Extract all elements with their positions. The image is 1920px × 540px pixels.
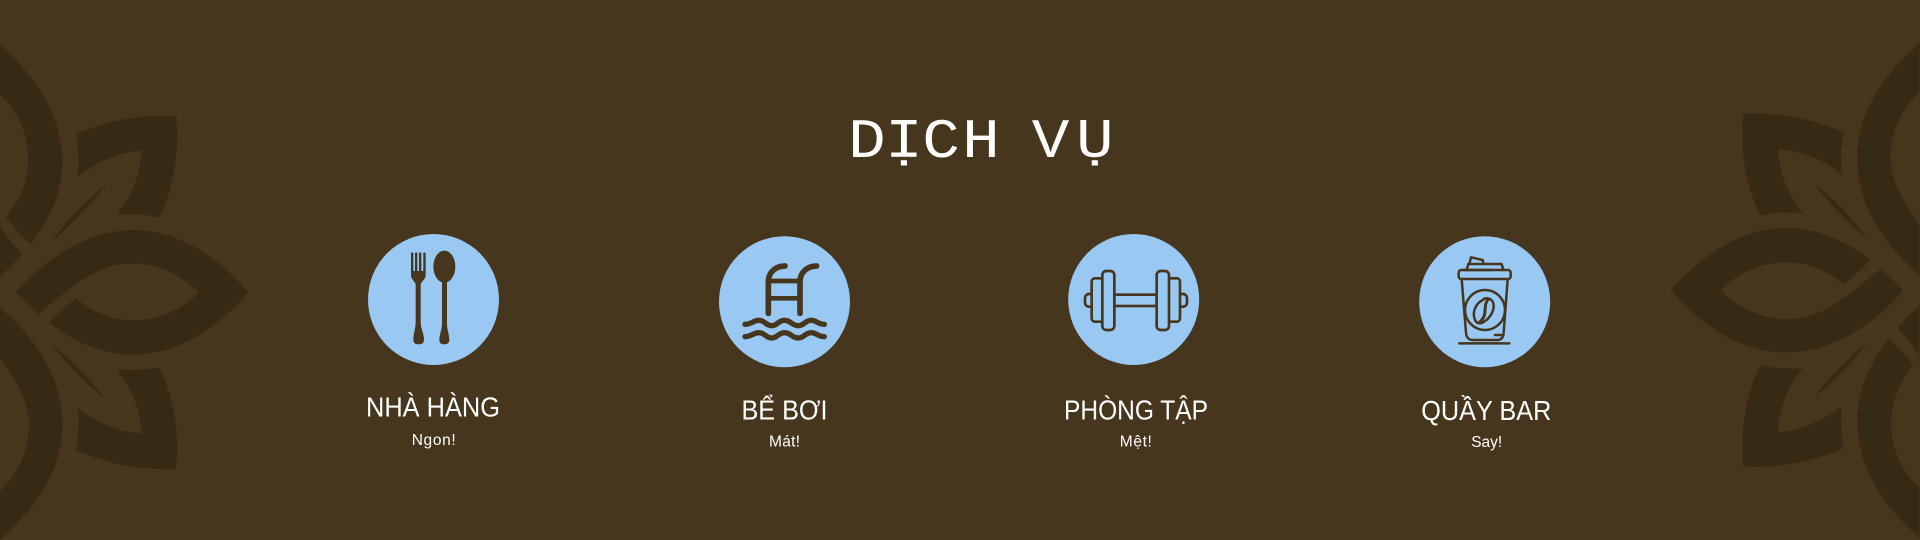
- icon: pool ladder and water: [719, 236, 850, 367]
- icon: fork and spoon: [368, 234, 499, 365]
- service: swimming pool: [719, 236, 850, 451]
- caption: swimming pool: Mát!: [769, 434, 800, 451]
- caption: restaurant: Ngon!: [412, 432, 456, 449]
- icon: coffee cup: [1419, 236, 1550, 367]
- service: bar: [1419, 236, 1551, 451]
- label: swimming pool: BỂ BƠI: [742, 394, 828, 425]
- label: bar: QUẦY BAR: [1421, 395, 1551, 426]
- label: gym: PHÒNG TẬP: [1064, 394, 1208, 426]
- label: restaurant: NHÀ HÀNG: [366, 392, 500, 423]
- decorative flower: right: [1671, 43, 1920, 538]
- icon: dumbbell: [1068, 234, 1199, 365]
- service: gym: [1064, 234, 1208, 451]
- service: restaurant: [366, 234, 500, 449]
- caption: gym: Mệt!: [1120, 434, 1152, 451]
- caption: bar: Say!: [1471, 434, 1502, 451]
- decorative flower: left: [0, 45, 248, 540]
- title: DỊCH VỤ: [848, 111, 1114, 174]
